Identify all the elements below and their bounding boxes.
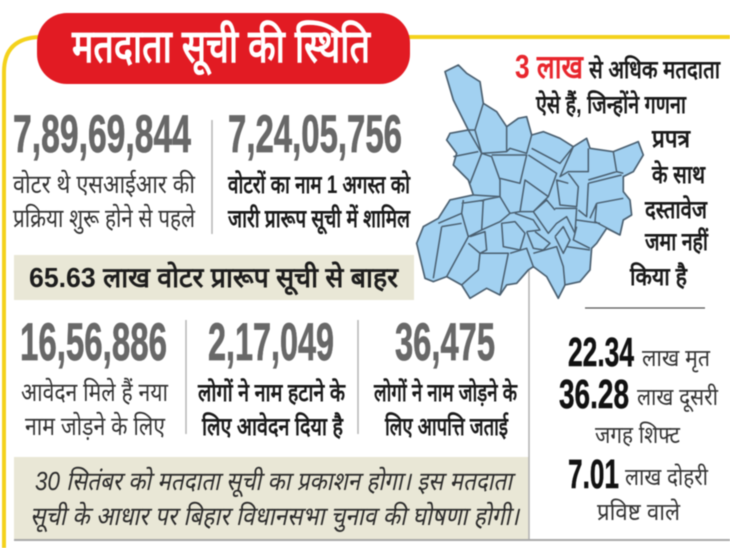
callout: 3 lakh voters: 3 लाख: [515, 48, 584, 85]
stat: voters before SIR: वोटर थे एसआईआर की: [13, 169, 196, 199]
stat: removal applications: [197, 313, 346, 441]
map of Bihar: [417, 65, 643, 298]
excluded voters band: 65.63 लाख वोटर प्रारूप सूची से बाहर: [29, 261, 399, 296]
breakdown of removed voters: लाख दोहरी: [625, 463, 709, 491]
stat: voters in draft roll: वोटरों का नाम 1 अगस्त को: [227, 170, 411, 199]
stat: objections: लिए आपत्ति जताई: [384, 412, 509, 441]
breakdown of removed voters: [559, 329, 719, 526]
stat: voters before SIR: 7,89,69,844: [13, 105, 191, 164]
stat: voters before SIR: [13, 105, 196, 234]
publication note band: सूची के आधार पर बिहार विधानसभा चुनाव की घोषणा होगी।: [30, 501, 521, 533]
title banner: [37, 13, 410, 84]
callout: 3 lakh voters: ऐसे हैं, जिन्होंने गणना: [535, 90, 687, 119]
title banner: मतदाता सूची की स्थिति: [71, 20, 371, 76]
stat: removal applications: 2,17,049: [208, 313, 334, 372]
stat: new name applications: नाम जोड़ने के लिए: [25, 411, 165, 441]
stat: objections: [373, 313, 518, 441]
callout: 3 lakh voters: [515, 48, 721, 291]
stat: removal applications: लिए आवेदन दिया है: [201, 412, 344, 441]
stat: voters before SIR: प्रक्रिया शुरू होने से पहले: [13, 203, 195, 234]
callout: 3 lakh voters: दस्तावेज: [644, 195, 708, 224]
breakdown of removed voters: लाख मृत: [642, 345, 711, 373]
stat: removal applications: लोगों ने नाम हटाने के: [197, 378, 346, 407]
breakdown of removed voters: 7.01: [568, 451, 619, 497]
callout: 3 lakh voters: प्रपत्र: [651, 125, 691, 153]
excluded voters band: [14, 255, 414, 300]
breakdown of removed voters: प्रविष्ट वाले: [597, 498, 681, 526]
breakdown of removed voters: लाख दूसरी: [637, 383, 719, 413]
breakdown of removed voters: 22.34: [568, 329, 634, 375]
publication note band: [14, 457, 529, 539]
callout: 3 lakh voters: किया है: [629, 262, 688, 291]
stat: voters in draft roll: 7,24,05,756: [228, 105, 402, 164]
breakdown of removed voters: जगह शिफ्ट: [595, 421, 681, 449]
stat: objections: लोगों ने नाम जोड़ने के: [373, 378, 518, 407]
stat: new name applications: 16,56,886: [20, 313, 167, 372]
breakdown of removed voters: 36.28: [559, 371, 629, 417]
callout: 3 lakh voters: जमा नहीं: [644, 227, 709, 256]
stat: objections: 36,475: [395, 313, 495, 372]
stat: new name applications: [20, 313, 169, 441]
stat: voters in draft roll: [227, 105, 411, 235]
callout: 3 lakh voters: के साथ: [651, 160, 706, 189]
stat: new name applications: आवेदन मिले हैं नया: [21, 377, 169, 407]
publication note band: 30 सितंबर को मतदाता सूची का प्रकाशन होगा। इस मतदाता: [35, 466, 517, 498]
stat: voters in draft roll: जारी प्रारूप सूची में शामिल: [227, 204, 411, 235]
